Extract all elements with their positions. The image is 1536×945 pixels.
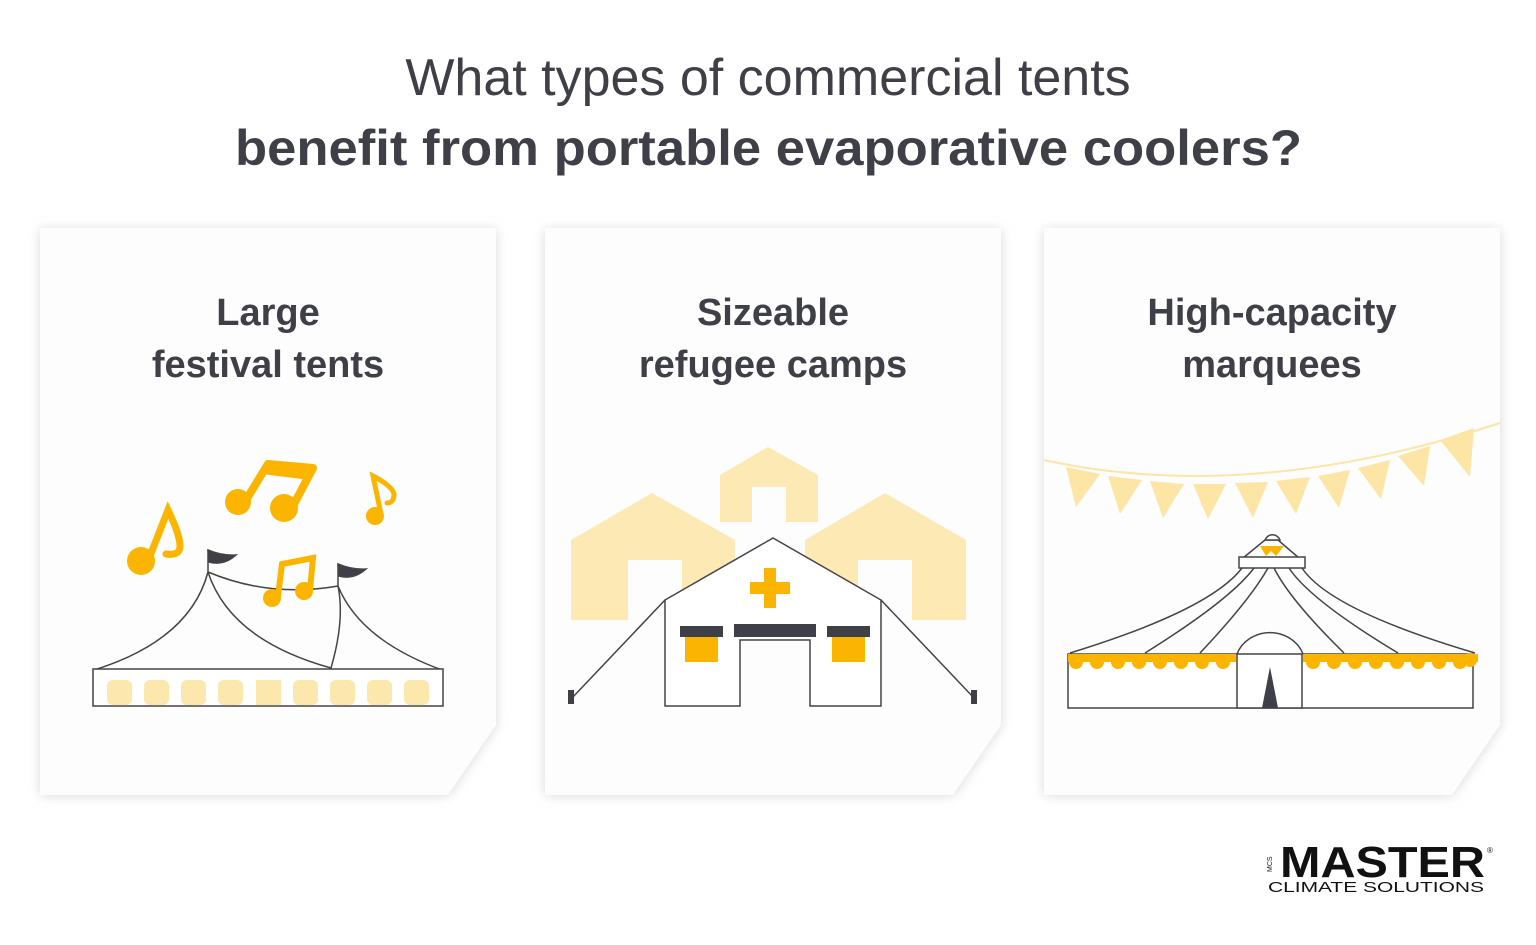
heading: High-capacity marquees: High-capacity bbox=[1147, 292, 1397, 334]
heading: Sizeable refugee camps: Sizeable bbox=[697, 292, 849, 334]
title bbox=[235, 49, 1302, 176]
icon: big top tent bbox=[1068, 535, 1475, 708]
icon: music notes bbox=[127, 462, 394, 607]
logo: MASTER climate solutions: MASTER bbox=[1280, 838, 1485, 887]
heading: High-capacity marquees: marquees bbox=[1182, 344, 1362, 386]
panel: refugee camps bbox=[545, 228, 1001, 795]
icon: medical tent bbox=[568, 538, 977, 706]
panel: festival tents bbox=[40, 228, 496, 795]
title: benefit from portable evaporative coolers? bbox=[235, 120, 1302, 176]
logo: MASTER climate solutions: CLIMATE SOLUTIONS bbox=[1268, 879, 1484, 896]
icon: bunting bbox=[1044, 423, 1500, 519]
logo: MASTER climate solutions: ® bbox=[1487, 846, 1493, 855]
logo: MASTER climate solutions: MCS bbox=[1267, 856, 1274, 872]
title: What types of commercial tents bbox=[405, 49, 1131, 107]
panel: marquees bbox=[1044, 228, 1500, 795]
logo: MASTER climate solutions bbox=[1267, 838, 1493, 896]
heading: Large festival tents: Large bbox=[216, 292, 320, 334]
heading: Sizeable refugee camps: refugee camps bbox=[639, 344, 907, 386]
icon: background tents bbox=[571, 447, 966, 620]
icon: festival tent bbox=[93, 550, 443, 706]
heading: Large festival tents: festival tents bbox=[152, 344, 384, 386]
